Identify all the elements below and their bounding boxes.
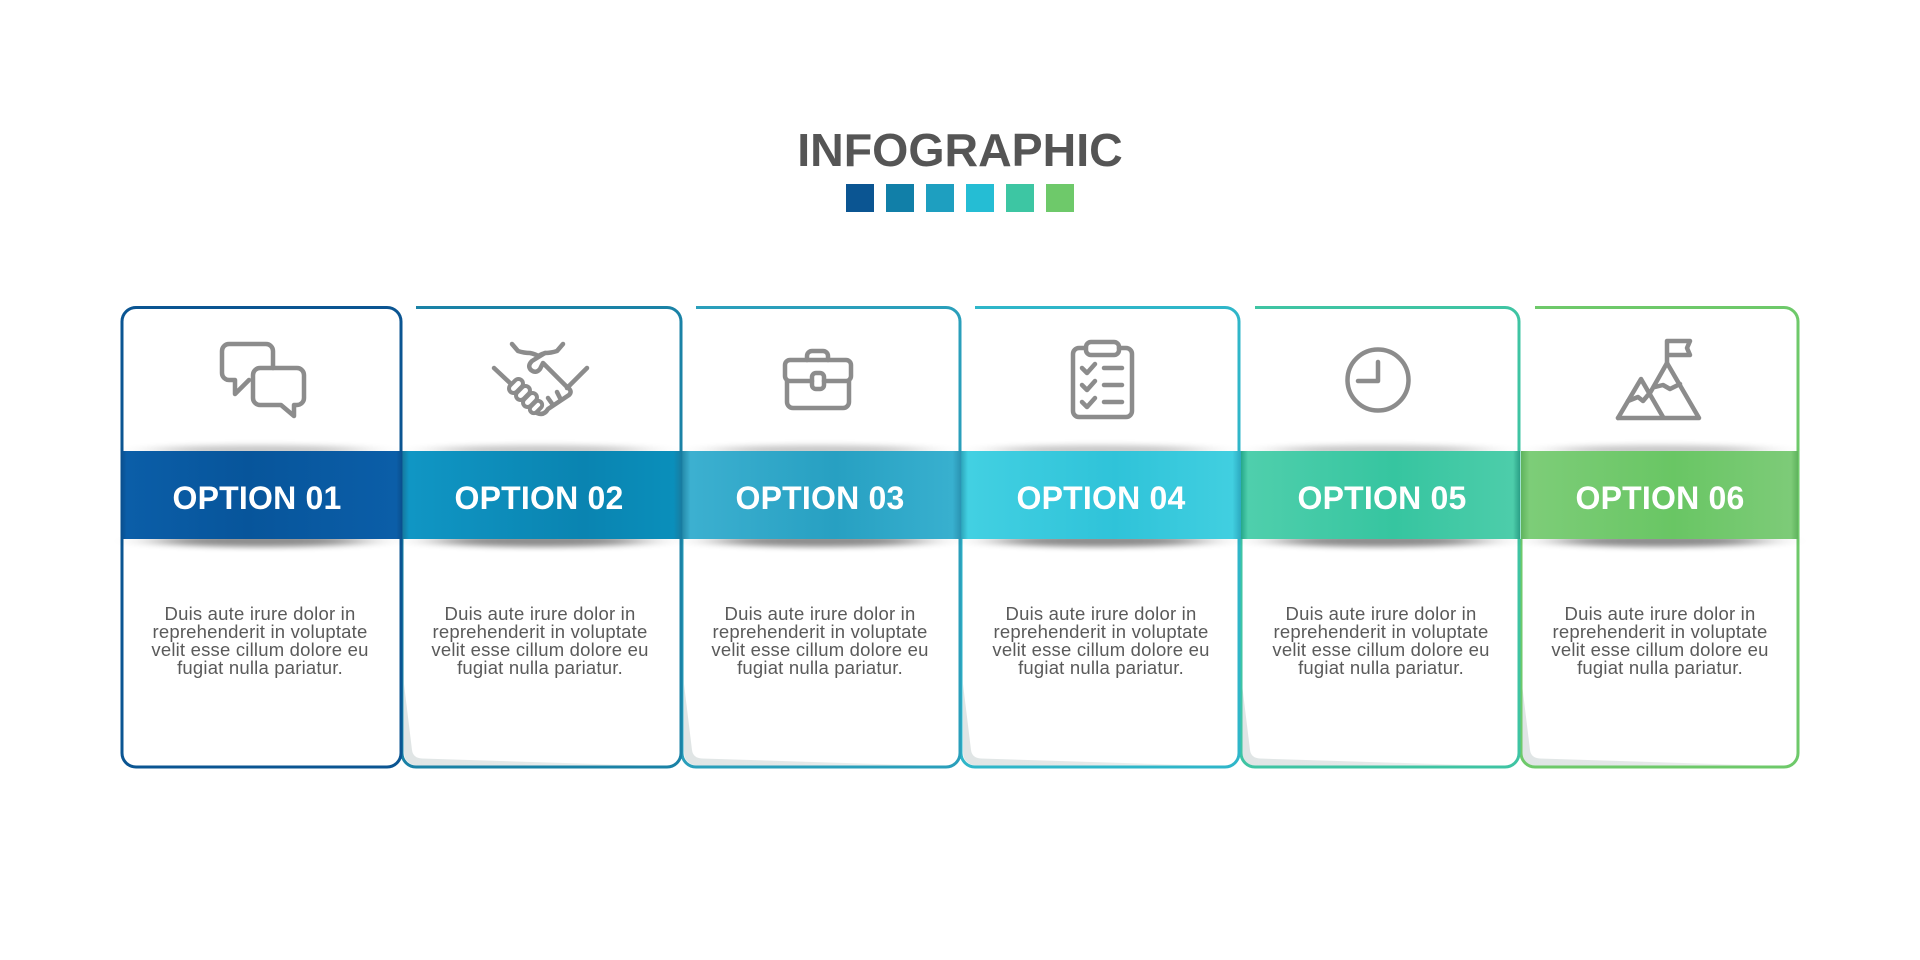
heading: option 02: OPTION 02 — [455, 480, 623, 516]
icon: handshake — [494, 344, 587, 415]
body text: option 06: velit esse cillum dolore eu — [1551, 639, 1769, 660]
heading: option 03: OPTION 03 — [736, 480, 904, 516]
heading: option 06: OPTION 06 — [1576, 480, 1744, 516]
heading: option 04: OPTION 04 — [1017, 480, 1185, 516]
body text: option 03: Duis aute irure dolor in — [725, 603, 915, 624]
band: option 04 — [961, 451, 1241, 539]
icon: clock — [1348, 350, 1408, 410]
panel: option 06 — [1521, 308, 1798, 767]
band: option 03 — [682, 451, 961, 539]
icon: briefcase — [785, 351, 851, 408]
panel: option 02 — [402, 308, 682, 767]
body text: option 01: reprehenderit in voluptate — [152, 621, 368, 642]
panel: option 03 — [682, 308, 961, 767]
body text: option 06: fugiat nulla pariatur. — [1577, 657, 1743, 678]
colour swatches — [846, 184, 1074, 212]
body text: option 02: velit esse cillum dolore eu — [431, 639, 649, 660]
body text: option 01: fugiat nulla pariatur. — [177, 657, 343, 678]
body text: option 02: fugiat nulla pariatur. — [457, 657, 623, 678]
body text: option 04: reprehenderit in voluptate — [993, 621, 1209, 642]
icon: clipboard checklist — [1073, 342, 1132, 417]
body text: option 03: velit esse cillum dolore eu — [711, 639, 929, 660]
body text: option 02: Duis aute irure dolor in — [445, 603, 635, 624]
body text: option 05: velit esse cillum dolore eu — [1272, 639, 1490, 660]
body text: option 03: reprehenderit in voluptate — [712, 621, 928, 642]
body text: option 01: Duis aute irure dolor in — [165, 603, 355, 624]
band: option 05 — [1241, 451, 1520, 539]
panel: option 01 — [121, 308, 402, 767]
panel: option 04 — [961, 308, 1241, 767]
band: option 02 — [402, 451, 682, 539]
heading: option 05: OPTION 05 — [1298, 480, 1466, 516]
heading: option 01: OPTION 01 — [173, 480, 341, 516]
body text: option 06: Duis aute irure dolor in — [1565, 603, 1755, 624]
body text: option 04: Duis aute irure dolor in — [1006, 603, 1196, 624]
body text: option 05: fugiat nulla pariatur. — [1298, 657, 1464, 678]
body text: option 03: fugiat nulla pariatur. — [737, 657, 903, 678]
title: INFOGRAPHIC — [797, 124, 1123, 176]
icon: mountain with flag — [1618, 341, 1699, 418]
body text: option 04: velit esse cillum dolore eu — [992, 639, 1210, 660]
body text: option 02: reprehenderit in voluptate — [432, 621, 648, 642]
panel: option 05 — [1241, 308, 1520, 767]
icon: speech bubbles — [222, 344, 304, 416]
body text: option 05: Duis aute irure dolor in — [1286, 603, 1476, 624]
body text: option 01: velit esse cillum dolore eu — [151, 639, 369, 660]
body text: option 04: fugiat nulla pariatur. — [1018, 657, 1184, 678]
body text: option 06: reprehenderit in voluptate — [1552, 621, 1768, 642]
body text: option 05: reprehenderit in voluptate — [1273, 621, 1489, 642]
band: option 01 — [121, 451, 402, 539]
band: option 06 — [1521, 451, 1798, 539]
